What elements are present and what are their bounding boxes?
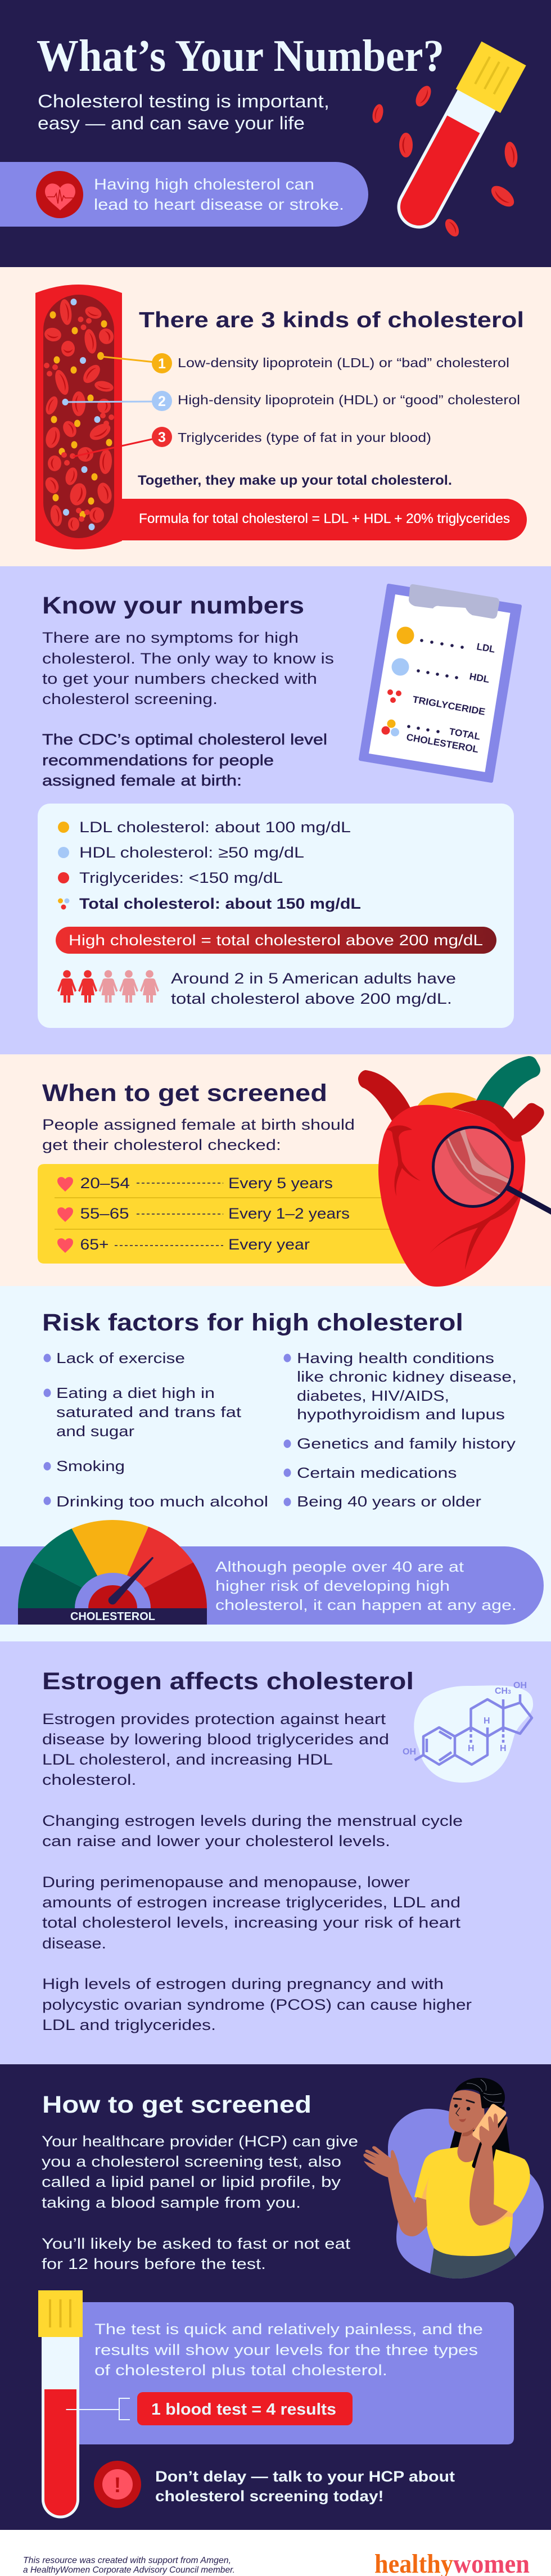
text: estrogen protection: Estrogen provides protection against heart [42,1711,386,1727]
call to action [155,2468,455,2505]
triglyceride particles [44,317,114,522]
list: HDL level: HDL cholesterol: ≥50 mg/dL [79,844,304,861]
list: risk factors left: Lack of exercise [56,1350,185,1366]
panel: 3 kinds of cholesterol [0,267,551,566]
icon: alert [94,2461,141,2508]
text: healthcare provider: you a cholesterol screening test, also [42,2153,341,2170]
icon: blood test tube [371,42,526,239]
panel: quick test: The test is quick and relatively painless, and the [94,2321,483,2338]
text: people assigned female [42,1116,355,1153]
list: risk factors right: Having health conditions [297,1350,494,1366]
phone [472,2104,506,2141]
text: CDC recommendations [42,731,327,789]
list: risk factors left: saturated and trans fat [56,1404,242,1420]
icon: clipboard: HDL [468,671,490,685]
text: together: Together, they make up your total cholesterol. [138,473,452,488]
list: LDL level: LDL cholesterol: about 100 mg/dL [79,819,351,836]
left arm and hand [363,2146,427,2236]
heading: how to get screened: How to get screened [42,2091,311,2118]
green vessel [476,1056,540,1108]
blood cells around the tube [371,83,519,239]
credit text [23,2556,235,2575]
panel: quick test: results will show your levels for the three types [94,2342,478,2358]
item: LDL [101,353,509,373]
card: optimal levels [38,804,514,1028]
list: risk factors left: and sugar [56,1423,134,1440]
icon: estrogen molecule [403,1681,533,1783]
heading: when to get screened: When to get screened [42,1080,327,1107]
icon: alert: ! [114,2474,121,2497]
text: CDC recommendations: recommendations for people [42,752,274,769]
text: menstrual cycle: Changing estrogen levels during the menstrual cycle [42,1812,463,1829]
subtitle: easy — and can save your life [38,113,305,133]
list: risk factors right [283,1350,517,1510]
text: healthcare provider: Your healthcare provider (HCP) can give [42,2133,358,2150]
text: estrogen protection: LDL cholesterol, and increasing HDL [42,1751,333,1768]
text: fasting: You’ll likely be asked to fast or not eat [42,2235,351,2252]
footer [0,2530,551,2576]
artery illustration [35,285,122,549]
panel: quick test [76,2302,514,2444]
banner: high cholesterol [56,927,496,954]
text: pregnancy and PCOS: LDL and triglycerides. [42,2016,216,2033]
text: pregnancy and PCOS: polycystic ovarian syndrome (PCOS) can cause higher [42,1996,472,2013]
panel: estrogen [0,1641,551,2064]
title: What’s Your Number? [37,31,444,81]
subtitle [38,91,329,133]
red blood cells [43,299,116,531]
row: 55–65: 55–65 [80,1205,129,1222]
text: menopause: amounts of estrogen increase triglycerides, LDL and [42,1894,460,1911]
item: HDL: 2 [158,394,166,409]
list: risk factors right: diabetes, HIV/AIDS, [297,1387,449,1404]
panel: know your numbers [0,566,551,1054]
list: risk factors right: Certain medications [297,1464,457,1481]
text: estrogen protection: cholesterol. [42,1771,136,1788]
heart body [378,1105,525,1287]
long hair [450,2106,510,2154]
panel: how to get screened [0,2064,551,2530]
icon: estrogen molecule: H [468,1744,475,1753]
icon: estrogen molecule: OH [513,1681,527,1690]
icon: estrogen molecule: H [484,1716,490,1726]
text: healthcare provider: called a lipid panel or lipid profile, by [42,2173,341,2190]
hair strand and braid [492,2148,496,2162]
text: menopause: total cholesterol levels, increasing your risk of heart [42,1914,461,1931]
row: 20–54: Every 5 years [228,1175,333,1192]
list: risk factors right: Being 40 years or older [297,1493,481,1510]
list: triglycerides level: Triglycerides: <150 mg/dL [79,869,283,886]
icon: 2 in 5 people [57,970,159,1003]
text: healthcare provider [42,2133,358,2211]
heading: estrogen: Estrogen affects cholesterol [42,1668,414,1695]
icon: estrogen molecule: OH [403,1747,416,1757]
text: menopause [42,1874,461,1952]
text: fasting: for 12 hours before the test. [42,2255,266,2272]
logo: healthywomen [374,2549,530,2576]
call to action: Don’t delay — talk to your HCP about [155,2468,455,2485]
row: 65+ [57,1236,310,1253]
badge: 1 blood test = 4 results: 1 blood test = 4 results [151,2401,336,2419]
icon: estrogen molecule: CH3 [495,1686,511,1696]
text: menopause: During perimenopause and menopause, lower [42,1874,410,1891]
yellow vessel [418,1093,477,1109]
badge: 1 blood test = 4 results [137,2392,353,2425]
text: estrogen protection [42,1711,389,1788]
row: 20–54 [57,1175,333,1192]
text: people assigned female: get their cholesterol checked: [42,1136,281,1153]
left dark vessel [358,1070,410,1122]
text: no symptoms: to get your numbers checked with [42,670,317,687]
text: no symptoms [42,629,334,707]
heading: risk factors: Risk factors for high cholesterol [42,1309,463,1336]
gauge: cholesterol meter [18,1520,207,1625]
icon: clipboard: TRIGLYCERIDE [412,694,486,718]
row: 65+: 65+ [80,1236,109,1253]
row: 55–65 [57,1205,350,1222]
text: CDC recommendations: assigned female at birth: [42,772,242,789]
facial features [454,2099,474,2122]
illustration: heart with magnifier [358,1056,551,1287]
panel: quick test: of cholesterol plus total cholesterol. [94,2362,387,2379]
icon: heart with pulse [36,171,83,218]
credit text: a HealthyWomen Corporate Advisory Council member. [23,2565,235,2575]
list: risk factors left: Eating a diet high in [56,1384,215,1401]
heart veins [386,1125,523,1270]
row: 55–65: Every 1–2 years [228,1205,350,1222]
icon: clipboard: TOTAL [448,726,481,742]
call to action: cholesterol screening today! [155,2488,383,2505]
callout: any age: Although people over 40 are at [215,1558,464,1575]
text: 2 in 5 adults [171,970,456,1007]
list: total level: Total cholesterol: about 150 mg/dL [79,895,361,912]
formula bar [118,499,527,540]
illustration: woman on phone [363,2078,544,2279]
item: triglycerides: Triglycerides (type of fat in your blood) [178,430,431,445]
heading: know your numbers: Know your numbers [42,592,304,619]
text: pregnancy and PCOS [42,1975,472,2033]
callout: heart disease: lead to heart disease or stroke. [94,196,344,213]
text: no symptoms: cholesterol. The only way to know is [42,650,334,667]
icon: clipboard [360,584,520,781]
right arm and hand [469,2113,508,2226]
text: estrogen protection: disease by lowering blood triglycerides and [42,1731,389,1748]
text: menstrual cycle: can raise and lower your cholesterol levels. [42,1833,390,1849]
item: HDL [65,391,520,411]
text: menstrual cycle [42,1812,463,1849]
row: 65+: Every year [228,1236,310,1253]
gauge: cholesterol meter: CHOLESTEROL [70,1610,155,1623]
panel: when to get screened [0,1054,551,1286]
neck [458,2131,482,2162]
item: triglycerides [73,427,431,457]
icon: vertical test tube [38,2290,83,2518]
sleeve shadows [422,2175,513,2226]
row: 20–54: 20–54 [80,1175,130,1192]
heading: 3 kinds: There are 3 kinds of cholesterol [139,308,524,332]
panel: risk factors [0,1286,551,1641]
text: no symptoms: There are no symptoms for high [42,629,299,646]
list: risk factors right: like chronic kidney disease, [297,1368,517,1385]
hair cap [454,2078,505,2109]
text: healthcare provider: taking a blood sample from you. [42,2194,301,2211]
item: LDL: Low-density lipoprotein (LDL) or “bad” cholesterol [178,355,509,370]
panel: intro header [0,0,551,267]
text: menopause: disease. [42,1935,106,1952]
LDL particles [49,312,112,518]
text: pregnancy and PCOS: High levels of estrogen during pregnancy and with [42,1975,444,1992]
item: HDL: High-density lipoprotein (HDL) or “good” cholesterol [178,393,520,407]
icon: clipboard: LDL [476,641,496,655]
table: screening schedule [38,1164,450,1264]
list: risk factors left: Drinking too much alcohol [56,1493,268,1510]
banner: high cholesterol: High cholesterol = total cholesterol above 200 mg/dL [69,932,483,949]
HDL particles [62,299,100,530]
list: risk factors right: Genetics and family history [297,1435,516,1452]
icon: clipboard: CHOLESTEROL [405,732,480,755]
callout: any age: higher risk of developing high [215,1577,450,1594]
shirt [414,2147,530,2256]
list: risk factors left [44,1350,268,1510]
subtitle: Cholesterol testing is important, [38,91,329,111]
text: no symptoms: cholesterol screening. [42,691,218,707]
item: LDL: 1 [158,356,166,372]
right dark vessel [451,1100,544,1142]
text: CDC recommendations: The CDC’s optimal cholesterol level [42,731,327,748]
text: 2 in 5 adults: Around 2 in 5 American adults have [171,970,456,987]
list: risk factors left: Smoking [56,1458,125,1474]
face [449,2090,485,2133]
bracket connector [66,2398,130,2420]
callout: heart disease [0,162,368,227]
credit text: This resource was created with support from Amgen, [23,2556,231,2565]
icon: estrogen molecule: H [500,1744,507,1753]
text: 2 in 5 adults: total cholesterol above 200 mg/dL. [171,990,452,1007]
text: people assigned female: People assigned female at birth should [42,1116,355,1133]
item: triglycerides: 3 [158,430,166,445]
list: risk factors right: hypothyroidism and lupus [297,1406,505,1423]
skirt [430,2245,516,2279]
callout: any age: cholesterol, it can happen at any age. [215,1596,517,1613]
formula bar: Formula for total cholesterol = LDL + HDL + 20% triglycerides [139,511,510,526]
callout: any age [0,1546,544,1625]
callout: heart disease: Having high cholesterol can [94,175,314,193]
magnifier [433,1127,551,1215]
text: fasting [42,2235,351,2272]
